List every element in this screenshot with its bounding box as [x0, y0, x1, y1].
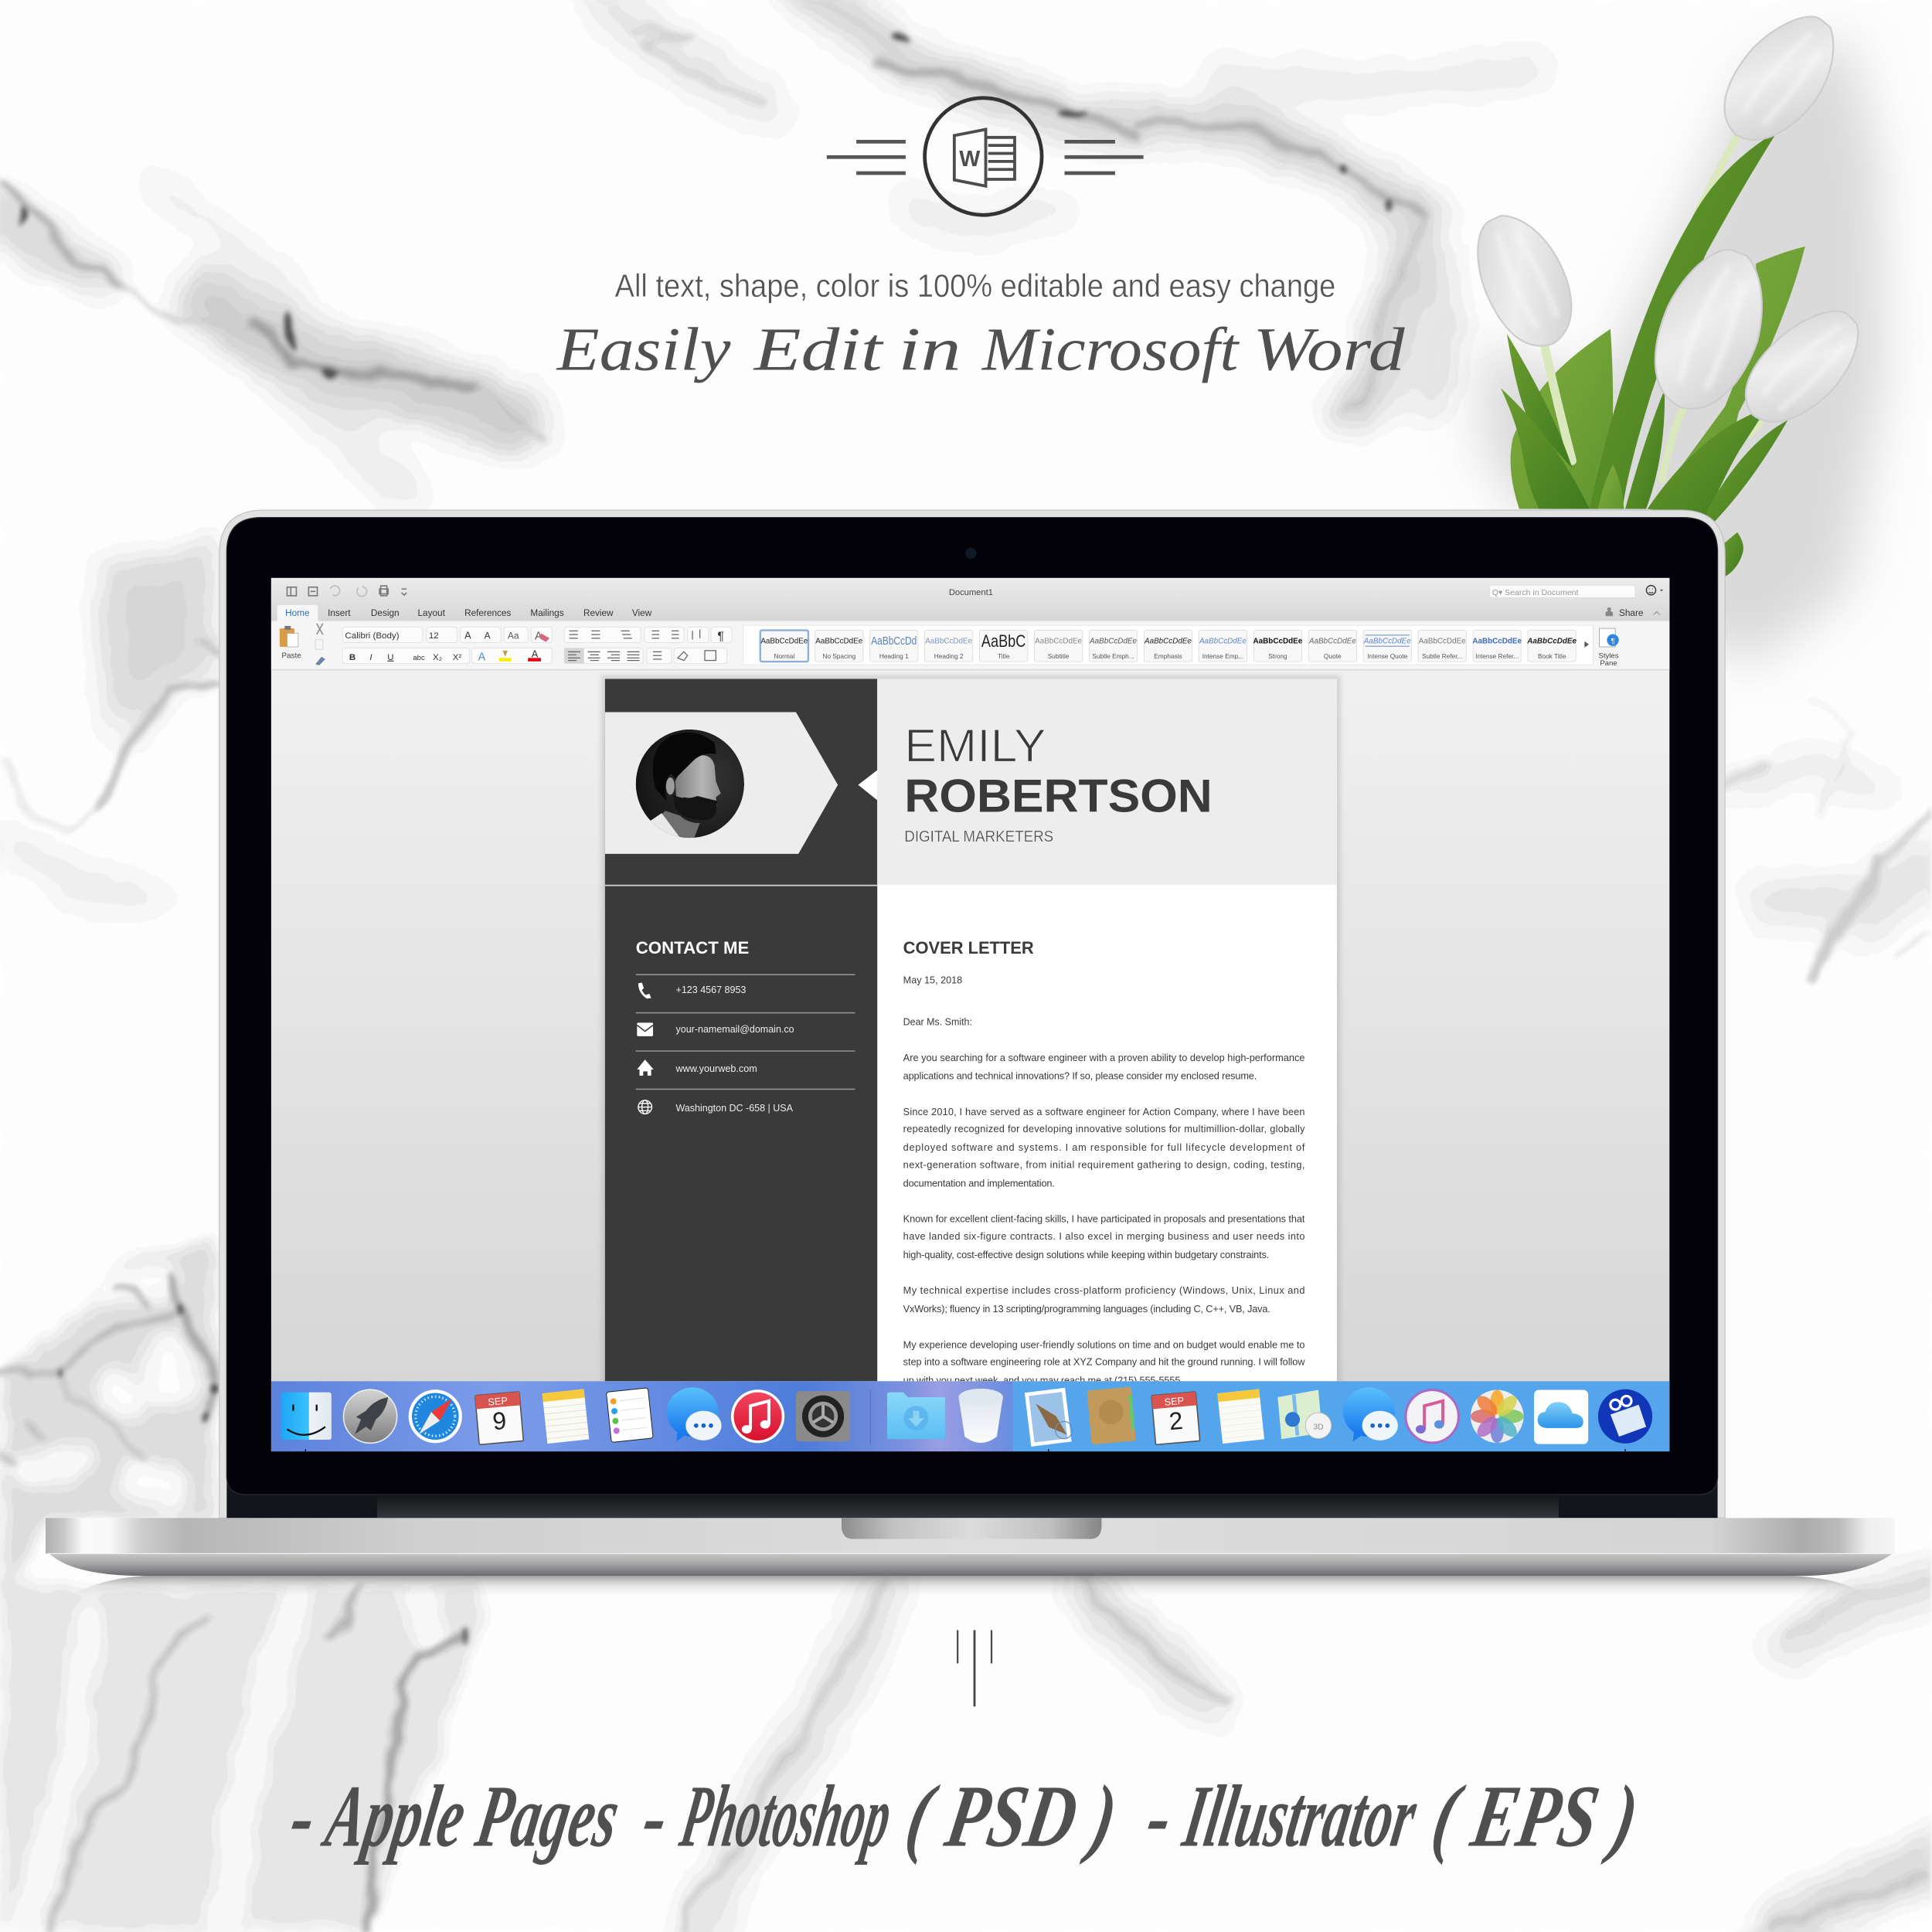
ribbon toolbar: 12 — [429, 631, 439, 641]
tulip buds — [1459, 0, 1878, 441]
style gallery: Subtle Emph... — [1092, 652, 1134, 660]
icon: contacts — [1087, 1387, 1136, 1444]
bottom format list: Illustrator — [1176, 1767, 1423, 1866]
icon: envelope — [637, 1022, 653, 1036]
icon: system preferences — [796, 1391, 850, 1441]
decorative divider: three vertical lines — [957, 1630, 992, 1706]
icon: photos — [1471, 1389, 1523, 1443]
contact panel: your-namemail@domain.co — [676, 1023, 794, 1035]
style gallery: Heading 2 — [934, 652, 964, 660]
style gallery: AaBbCcDdEe — [1144, 637, 1192, 645]
ribbon toolbar: X² — [453, 653, 461, 662]
icon: phone — [638, 983, 651, 998]
ribbon toolbar: I — [369, 653, 372, 662]
icon: reminders — [606, 1388, 653, 1442]
resume page — [601, 675, 1341, 1389]
ribbon toolbar: abc — [413, 654, 425, 662]
icon: icloud — [1534, 1389, 1588, 1444]
bud top — [1704, 0, 1857, 160]
contact panel: CONTACT ME — [636, 938, 749, 957]
style gallery: Normal — [774, 652, 794, 660]
laptop base — [46, 1518, 1895, 1576]
ribbon toolbar: A — [532, 648, 539, 660]
laptop — [46, 510, 1895, 1597]
name header panel — [877, 679, 1337, 885]
icon: messages right — [1343, 1387, 1398, 1441]
cover letter text: Dear Ms. Smith: — [903, 1016, 972, 1028]
bottom format list: Apple Pages — [316, 1767, 626, 1866]
ribbon toolbar: ¶ — [717, 630, 724, 643]
ribbon toolbar: Aa — [508, 631, 519, 641]
contact panel: Washington DC -658 | USA — [676, 1102, 793, 1114]
cover letter text: next-generation software, from initial requirement gathering to design, coding, testing, — [903, 1158, 1304, 1170]
ribbon toolbar: U — [387, 653, 394, 662]
bottom format list: - — [1140, 1767, 1179, 1866]
style gallery: AaBbCcDdEe — [1253, 637, 1303, 645]
ribbon tabs: Insert — [328, 608, 351, 618]
style gallery: AaBbC — [981, 631, 1026, 651]
icon: itunes white — [1406, 1389, 1458, 1443]
styles pane button: Styles — [1598, 651, 1619, 660]
icon: Microsoft Word badge with speed lines — [827, 98, 1144, 215]
style gallery: AaBbCcDdEe — [1472, 637, 1522, 645]
style gallery: Quote — [1324, 652, 1342, 660]
ribbon tabs: Design — [371, 608, 400, 618]
icon: calendar left: SEP — [488, 1395, 508, 1408]
icon: calendar right: 2 — [1168, 1406, 1184, 1435]
ribbon tabs: Mailings — [530, 608, 564, 618]
dark sidebar — [605, 679, 877, 1387]
ribbon toolbar: Calibri (Body) — [345, 631, 400, 641]
bottom format list — [284, 1767, 1645, 1866]
cover letter text — [903, 938, 1305, 1386]
icon: maps — [1277, 1389, 1332, 1439]
icon: itunes red — [731, 1389, 784, 1443]
title bar: Share — [1619, 608, 1644, 618]
icon: calendar left: 9 — [492, 1406, 508, 1435]
styles pane button: Pane — [1600, 659, 1617, 668]
bud center — [1636, 236, 1784, 424]
tulip leaves behind stems — [1511, 247, 1805, 509]
icon: calendar left — [475, 1392, 523, 1444]
bottom format list: ( PSD ) — [900, 1767, 1124, 1866]
screen: Word window — [271, 578, 1669, 1453]
candidate name: EMILY — [904, 719, 1046, 771]
paste and clipboard tools — [280, 624, 325, 665]
ribbon tabs: Home — [285, 608, 310, 618]
style gallery: Intense Quote — [1367, 652, 1408, 660]
script heading: Easily — [556, 315, 731, 383]
illustration: white tulips — [1459, 0, 1885, 665]
style gallery: Heading 1 — [879, 652, 909, 660]
title bar: Document1 — [949, 588, 993, 597]
icon: finder — [281, 1393, 332, 1440]
cover letter text: up with you next week, and you may reach me at (215) 555-5555 — [903, 1374, 1180, 1386]
tulip leaves in front of stems — [1501, 131, 1787, 577]
style gallery: Title — [998, 652, 1010, 660]
ribbon toolbar: A — [485, 631, 491, 641]
styles pane button — [1598, 628, 1619, 668]
cover letter text: deployed software and systems. I am responsible for full lifecycle development of — [903, 1141, 1305, 1153]
icon: safari — [409, 1389, 462, 1443]
bottom format list: - — [636, 1767, 675, 1866]
ribbon toolbar: X₂ — [433, 653, 442, 662]
script heading — [556, 315, 1406, 383]
cover letter text: My technical expertise includes cross-platform proficiency (Windows, Unix, Linux and — [903, 1284, 1304, 1296]
ribbon toolbar: A — [535, 630, 543, 642]
icon: notes right — [1217, 1389, 1264, 1444]
mac dock — [271, 1381, 1669, 1453]
style gallery: AaBbCcDdEe — [1308, 637, 1356, 645]
candidate name: ROBERTSON — [904, 770, 1213, 822]
ribbon tabs: View — [632, 608, 652, 618]
ribbon tabs: Review — [583, 608, 614, 618]
style gallery — [743, 625, 1594, 665]
cover letter text: My experience developing user-friendly solutions on time and on budget would enable me to — [903, 1338, 1304, 1350]
style gallery: AaBbCcDdEe — [1199, 637, 1247, 645]
style gallery: AaBbCcDdEe — [1526, 637, 1577, 645]
title bar — [271, 578, 1669, 621]
lid notch — [842, 1518, 1101, 1539]
cover letter text: high-quality, cost-effective design solutions while keeping within budgetary constraints. — [903, 1249, 1269, 1260]
cover letter text: repeatedly recognized for developing innovative solutions for multimillion-dollar, globally — [903, 1123, 1305, 1134]
webcam — [965, 548, 977, 559]
style gallery: Intense Emp... — [1202, 652, 1243, 660]
portrait photo — [636, 730, 744, 845]
contact panel: www.yourweb.com — [675, 1063, 757, 1074]
icon: messages left — [667, 1387, 722, 1441]
ribbon tabs — [277, 605, 652, 621]
icon: globe — [638, 1100, 651, 1114]
script heading: Word — [1253, 315, 1406, 383]
style gallery: Subtle Refer... — [1422, 652, 1462, 660]
cover letter text: documentation and implementation. — [903, 1177, 1055, 1189]
style gallery: AaBbCcDdEe — [760, 637, 808, 645]
icon: launchpad rocket — [344, 1389, 397, 1443]
bottom format list: - — [284, 1767, 323, 1866]
style gallery: AaBbCcDdEe — [815, 637, 863, 645]
cover letter text: Are you searching for a software engineer with a proven ability to develop high-performance — [903, 1052, 1304, 1063]
cover letter text: have landed six-figure contracts. I also excel in merging business and user needs into — [903, 1230, 1304, 1242]
icon: imovie — [1598, 1389, 1652, 1444]
cover letter text: May 15, 2018 — [903, 974, 962, 985]
cover letter text: Since 2010, I have served as a software engineer for Action Company, where I have been — [903, 1106, 1304, 1117]
laptop lid — [219, 510, 1725, 1518]
candidate name: DIGITAL MARKETERS — [904, 828, 1053, 845]
ribbon toolbar: A — [478, 651, 486, 664]
chevron photo banner — [605, 713, 838, 854]
icon: calendar right: SEP — [1164, 1395, 1185, 1408]
icon: Microsoft Word badge with speed lines: W — [959, 147, 981, 172]
ribbon toolbar: B — [349, 653, 355, 662]
style gallery: Emphasis — [1154, 652, 1182, 660]
style gallery: Intense Refer... — [1475, 652, 1519, 660]
bud right — [1727, 293, 1878, 441]
style gallery: AaBbCcDd — [871, 635, 917, 648]
style gallery: AaBbCcDdEe — [925, 637, 973, 645]
cover letter text: applications and technical innovations? If so, please consider my enclosed resume. — [903, 1070, 1257, 1082]
icon: trash — [958, 1389, 1003, 1443]
bottom format list: ( EPS ) — [1426, 1767, 1645, 1866]
style gallery: AaBbCcDdEe — [1419, 637, 1466, 645]
icon: downloads folder — [887, 1393, 945, 1439]
paste and clipboard tools: Paste — [281, 651, 301, 660]
icon: calendar right — [1151, 1392, 1200, 1444]
cover letter text: VxWorks); fluency in 13 scripting/programming languages (including C, C++, VB, Java. — [903, 1303, 1270, 1315]
contact panel — [636, 938, 855, 1114]
ribbon tabs: References — [464, 608, 511, 618]
ribbon tabs: Layout — [417, 608, 446, 618]
icon: house — [637, 1060, 654, 1076]
bottom format list: Photoshop — [674, 1767, 899, 1866]
ribbon toolbar: A — [464, 630, 471, 641]
laptop shadow — [68, 1576, 1872, 1597]
bud left — [1459, 202, 1589, 360]
style gallery: AaBbCcDdEe — [1363, 637, 1411, 645]
style gallery: AaBbCcDdEe — [1089, 637, 1137, 645]
candidate name — [904, 719, 1213, 845]
subtitle line: All text, shape, color is 100% editable and easy change — [615, 267, 1335, 304]
style gallery: Strong — [1268, 652, 1287, 660]
icon: maps: 3D — [1313, 1423, 1324, 1431]
font controls — [342, 628, 732, 664]
tulip stems — [1544, 128, 1762, 479]
styles pane button: ¶ — [1611, 637, 1615, 645]
ribbon toolbar — [271, 621, 1669, 671]
script heading: Edit — [753, 315, 884, 383]
script heading: Microsoft — [981, 315, 1240, 383]
style gallery: Book Title — [1538, 652, 1566, 660]
cover letter text: Known for excellent client-facing skills, I have participated in proposals and presentations that — [903, 1213, 1305, 1225]
cover letter text: step into a software engineering role at XYZ Company and hit the ground running. I will follow — [903, 1356, 1305, 1368]
cover letter text: COVER LETTER — [903, 938, 1034, 957]
title bar: Q▾ Search in Document — [1492, 588, 1579, 597]
style gallery: No Spacing — [822, 652, 856, 660]
icon: mail stamp — [1025, 1387, 1074, 1447]
style gallery: Subtitle — [1048, 652, 1070, 660]
icon: notes left — [543, 1389, 589, 1444]
style gallery: AaBbCcDdEe — [1035, 637, 1083, 645]
script heading: in — [898, 315, 961, 383]
contact panel: +123 4567 8953 — [676, 984, 746, 995]
